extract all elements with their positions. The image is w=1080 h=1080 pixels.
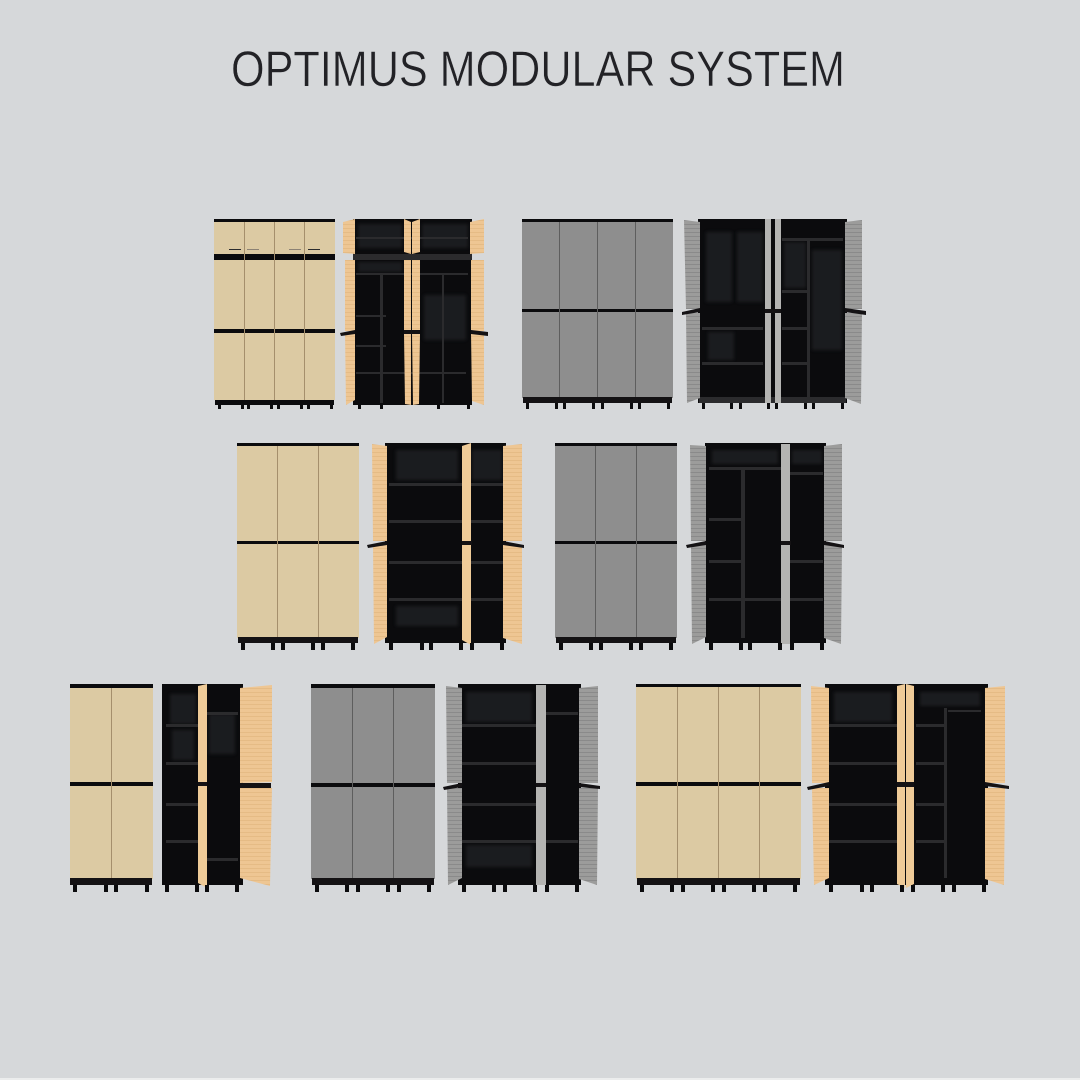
beige three-door cabinet, closed: [237, 443, 359, 650]
grey three-door cabinet, closed: [555, 443, 677, 650]
beige tall cabinet with top unit, closed: [214, 219, 335, 409]
title: OPTIMUS MODULAR SYSTEM: [231, 41, 845, 97]
grey three-door cabinet, open: [686, 443, 844, 650]
grey three-door cabinet, lower row closed: [311, 684, 435, 892]
grey tall cabinet, open: [682, 219, 866, 409]
beige tall cabinet with top unit, open: [340, 219, 488, 409]
beige two-door cabinet, closed: [70, 684, 153, 892]
grey three-door cabinet, lower row open: [443, 684, 600, 892]
beige four-door cabinet, closed: [636, 684, 801, 892]
beige four-door cabinet, open: [807, 684, 1009, 892]
grey tall cabinet, closed: [522, 219, 673, 409]
beige two-door cabinet, open: [162, 684, 272, 892]
beige three-door cabinet, open: [367, 443, 524, 650]
